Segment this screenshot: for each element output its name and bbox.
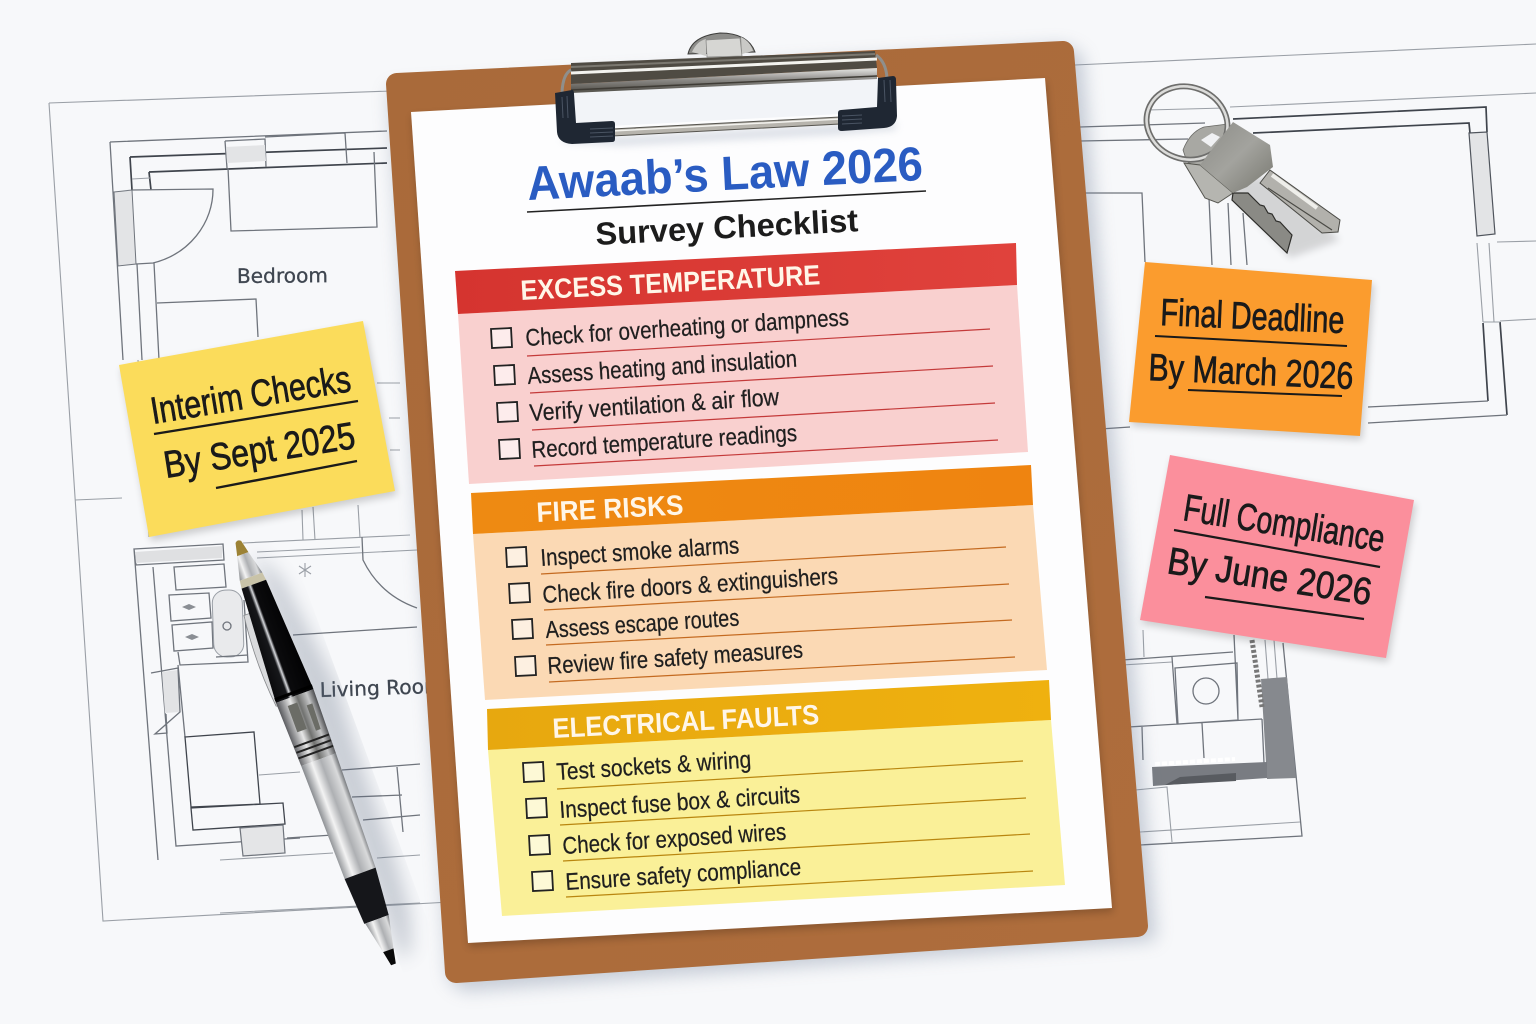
checklist row 3 bbox=[529, 819, 1030, 861]
checklist row 2: Check fire doors & extinguishers bbox=[542, 563, 839, 609]
header: electrical faults bbox=[487, 680, 1051, 750]
clip right handle bbox=[838, 76, 897, 131]
sticky note: interim checks: By Sept 2025 bbox=[161, 415, 358, 487]
sticky note: final deadline bbox=[1129, 262, 1374, 440]
sticky note: final deadline: Final Deadline bbox=[1160, 292, 1345, 342]
checklist row 2 bbox=[526, 781, 1026, 825]
checklist row 3: Verify ventilation & air flow bbox=[529, 384, 780, 427]
icon: pen bbox=[216, 525, 434, 973]
pen grip bbox=[345, 868, 392, 925]
sticky note: interim checks: Interim Checks bbox=[148, 358, 354, 433]
checklist row 2 bbox=[509, 563, 1009, 610]
checklist row 4: Ensure safety compliance bbox=[565, 854, 802, 896]
checklist row 4 bbox=[499, 420, 998, 466]
title text: Awaab’s Law 2026 bbox=[526, 138, 924, 211]
checklist row 1: Inspect smoke alarms bbox=[540, 532, 740, 572]
header: electrical faults: ELECTRICAL FAULTS bbox=[552, 699, 820, 744]
checklist row 1 bbox=[506, 532, 1006, 574]
checklist row 4: Record temperature readings bbox=[531, 420, 798, 464]
header: excess temperature: EXCESS TEMPERATURE bbox=[520, 259, 821, 306]
floor plan: kitchen and living room bbox=[134, 535, 420, 913]
checklist row 2: Inspect fuse box & circuits bbox=[559, 781, 801, 824]
front key bbox=[1200, 122, 1340, 233]
icon: keys bbox=[1136, 75, 1340, 258]
sticky note: final deadline: By March 2026 bbox=[1148, 347, 1354, 398]
clip bar bbox=[571, 51, 877, 84]
checklist row 3: Check for exposed wires bbox=[562, 819, 787, 860]
sticky note: full compliance bbox=[1140, 455, 1416, 662]
text label: Bedroom: Bedroom bbox=[237, 263, 328, 288]
clipboard board bbox=[389, 46, 1156, 991]
checklist row 4: Review fire safety measures bbox=[547, 637, 804, 680]
checklist row 2 bbox=[494, 346, 993, 393]
checklist row 4 bbox=[532, 854, 1033, 897]
panel: excess temperature bbox=[455, 243, 1028, 484]
clip lower rod bbox=[612, 117, 840, 136]
checklist paper bbox=[411, 78, 1113, 947]
checklist row 1: Check for overheating or dampness bbox=[525, 304, 850, 352]
panel: fire risks bbox=[471, 465, 1047, 700]
floor plan: right bbox=[1075, 44, 1536, 845]
pen clear section bbox=[276, 689, 337, 767]
header: fire risks bbox=[471, 465, 1033, 534]
pen tip bbox=[365, 915, 400, 955]
checklist row 1 bbox=[523, 746, 1023, 789]
checklist row 3 bbox=[497, 384, 995, 430]
header: fire risks: FIRE RISKS bbox=[536, 489, 684, 528]
sticky note: full compliance: By June 2026 bbox=[1165, 540, 1375, 614]
pen silver body bbox=[301, 753, 377, 880]
sticky note: full compliance: Full Compliance bbox=[1181, 487, 1388, 561]
clipboard clip bbox=[555, 33, 897, 146]
floor plan: left bbox=[49, 91, 450, 921]
key ring bbox=[1136, 75, 1238, 171]
panel: electrical faults bbox=[487, 680, 1065, 916]
checklist row 3: Assess escape routes bbox=[545, 605, 740, 644]
checklist row 3 bbox=[512, 605, 1012, 645]
checklist row 1 bbox=[491, 304, 990, 356]
checklist row 4 bbox=[515, 637, 1015, 682]
clip top tab bbox=[688, 33, 755, 57]
header: excess temperature bbox=[455, 243, 1017, 314]
back key bbox=[1183, 124, 1292, 253]
pen barrel bbox=[235, 577, 313, 703]
checklist row 1: Test sockets & wiring bbox=[556, 746, 752, 786]
pen clip bbox=[241, 613, 283, 709]
floor plan: lower right bbox=[1122, 630, 1302, 845]
pen nose bbox=[232, 538, 248, 556]
subtitle: Survey Checklist bbox=[594, 202, 859, 252]
paper under clip bbox=[572, 77, 878, 128]
checklist row 2: Assess heating and insulation bbox=[527, 346, 798, 390]
text label: Living Room: Living Room bbox=[319, 674, 444, 702]
clip left handle bbox=[555, 90, 615, 144]
sticky note: interim checks bbox=[119, 321, 397, 541]
title bbox=[526, 138, 926, 252]
